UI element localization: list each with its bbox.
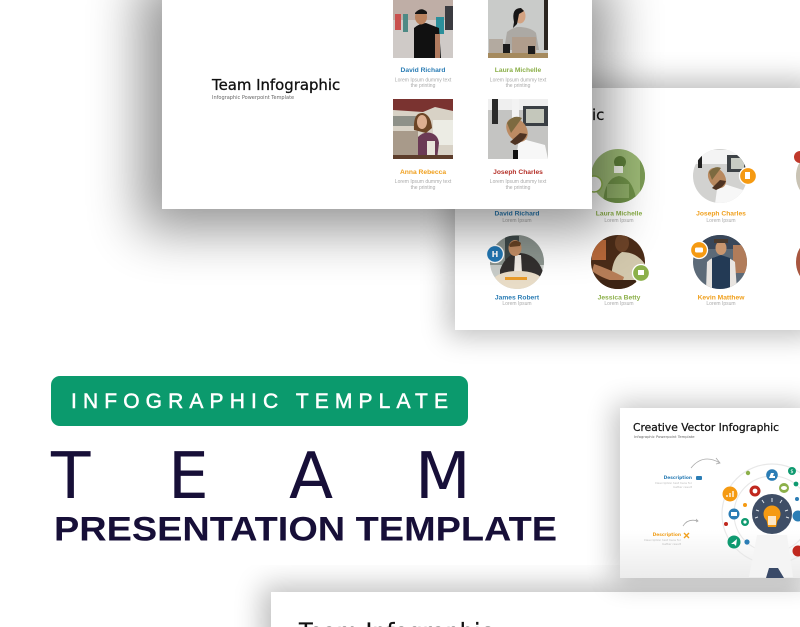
card: Anna Rebecca bbox=[393, 99, 453, 191]
card: David Richard: the printing bbox=[411, 83, 436, 89]
panel: team infographic main slide bbox=[140, 0, 610, 230]
description one: better result bbox=[673, 485, 693, 489]
panel: team circles slide: Laura Michelle bbox=[596, 210, 643, 218]
slide heading fragment: ic bbox=[592, 106, 604, 124]
description two: Description text here for bbox=[644, 538, 682, 542]
badge bbox=[632, 264, 650, 282]
card: David Richard bbox=[393, 0, 453, 89]
panel: bottom slide bbox=[262, 586, 800, 627]
card: Anna Rebecca: Lorem Ipsum dummy text bbox=[395, 179, 452, 185]
card: Anna Rebecca: Anna Rebecca bbox=[400, 169, 446, 176]
slide subtitle: Infographic Powerpoint Template bbox=[212, 95, 294, 101]
card: Anna Rebecca: the printing bbox=[411, 185, 436, 191]
badge: infographic template bbox=[51, 376, 468, 426]
badge bbox=[586, 176, 602, 192]
description one: Description text here for bbox=[655, 481, 693, 485]
panel: team circles slide bbox=[448, 80, 800, 336]
card: Laura Michelle: Laura Michelle bbox=[495, 67, 542, 74]
card: Laura Michelle: Lorem Ipsum dummy text bbox=[490, 78, 547, 84]
person: Jessica Betty: Lorem Ipsum bbox=[604, 301, 634, 307]
partial person bottom right bbox=[796, 235, 800, 289]
description one: Description bbox=[664, 475, 692, 481]
card: David Richard: David Richard bbox=[401, 67, 445, 74]
panel: team circles slide: Joseph Charles bbox=[696, 210, 746, 218]
card: Joseph Charles bbox=[488, 99, 548, 191]
description two: Description bbox=[653, 532, 681, 538]
person: Jessica Betty bbox=[591, 234, 650, 307]
card: Laura Michelle bbox=[488, 0, 548, 89]
slide heading: Creative Vector Infographic bbox=[633, 421, 779, 434]
partial person top right bbox=[794, 149, 800, 203]
light bulb diagram bbox=[722, 464, 800, 578]
card: David Richard: Lorem Ipsum dummy text bbox=[395, 78, 452, 84]
person: David Richard: David Richard bbox=[495, 210, 539, 218]
description two bbox=[644, 532, 689, 546]
light bulb diagram: $ bbox=[790, 469, 794, 475]
person: Jessica Betty: Jessica Betty bbox=[598, 294, 641, 302]
card: Joseph Charles: the printing bbox=[506, 185, 531, 191]
title: team: TEAM bbox=[50, 439, 471, 514]
card: Joseph Charles: Joseph Charles bbox=[493, 169, 543, 176]
badge bbox=[486, 246, 504, 262]
person: David Richard: Lorem Ipsum bbox=[502, 218, 532, 224]
person: James Robert bbox=[486, 235, 544, 307]
badge bbox=[740, 168, 756, 184]
person: James Robert: H bbox=[492, 250, 498, 259]
person: James Robert: James Robert bbox=[495, 294, 540, 302]
card: Joseph Charles: Lorem Ipsum dummy text bbox=[490, 179, 547, 185]
person: James Robert: Lorem Ipsum bbox=[502, 301, 532, 307]
panel: team circles slide: Lorem Ipsum bbox=[706, 218, 736, 224]
slide title: Team Infographic bbox=[211, 76, 340, 94]
badge bbox=[690, 242, 708, 258]
person: Kevin Matthew: Kevin Matthew bbox=[698, 294, 745, 302]
person: Laura Michelle bbox=[592, 149, 645, 203]
slide subheading: Infographic Powerpoint Template bbox=[634, 435, 695, 439]
person: Kevin Matthew bbox=[690, 235, 748, 307]
arrow one bbox=[691, 458, 720, 468]
badge: infographic template: INFOGRAPHIC TEMPLATE bbox=[71, 390, 448, 413]
arrow two bbox=[683, 519, 698, 526]
person: David Richard bbox=[495, 210, 539, 224]
person: Kevin Matthew: Lorem Ipsum bbox=[706, 301, 736, 307]
description one bbox=[655, 475, 702, 489]
panel: team circles slide: Lorem Ipsum bbox=[604, 218, 634, 224]
panel: creative vector slide bbox=[614, 404, 800, 582]
person: Joseph Charles bbox=[693, 149, 756, 204]
card: Laura Michelle: the printing bbox=[506, 83, 531, 89]
subtitle: presentation template: PRESENTATION TEMPLATE bbox=[54, 510, 557, 548]
description two: better result bbox=[662, 542, 682, 546]
